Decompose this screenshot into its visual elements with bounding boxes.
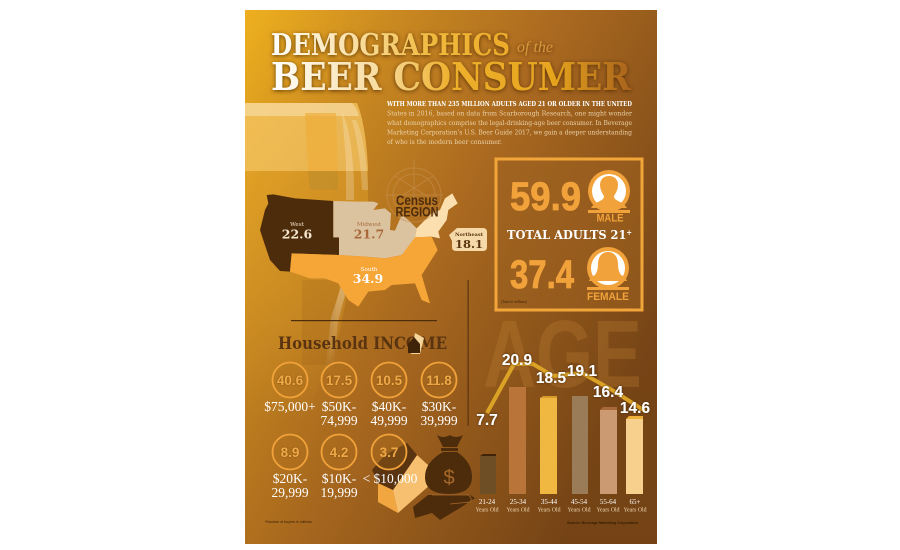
icon: male bbox=[588, 170, 630, 224]
icon: money bag and hand: $ bbox=[443, 467, 455, 489]
income: $75,000+: 40.6 bbox=[277, 373, 304, 388]
divider bbox=[291, 320, 437, 321]
age labels: Years Old bbox=[596, 508, 620, 514]
census region map bbox=[260, 160, 487, 307]
footnote: number of buyers: *Number of buyers in millions bbox=[265, 520, 312, 524]
age labels: 65+ bbox=[630, 498, 641, 506]
income: $30K-39,999: $30K- bbox=[422, 399, 457, 414]
income: $50K-74,999: 17.5 bbox=[326, 373, 353, 388]
age labels bbox=[475, 498, 647, 514]
icon: male: MALE bbox=[596, 212, 624, 224]
intro text: what demographics comprise the legal-drinking-age beer consumer. In Beverage bbox=[387, 119, 632, 127]
age labels: 55-64 bbox=[600, 498, 617, 506]
income: under $10,000: 3.7 bbox=[380, 445, 398, 460]
income: $75,000+ bbox=[264, 362, 316, 414]
icon: female bbox=[587, 247, 629, 303]
south value: 34.9 bbox=[353, 271, 383, 286]
age trend line bbox=[487, 364, 645, 413]
northeast value callout: 18.1 bbox=[455, 237, 483, 251]
map: northeast bbox=[415, 193, 458, 238]
male value: 59.9 bbox=[510, 175, 581, 219]
census region label bbox=[396, 192, 438, 220]
income: $10K-19,999: 19,999 bbox=[320, 485, 358, 500]
income: $20K-29,999: 8.9 bbox=[281, 445, 299, 460]
map: south bbox=[290, 237, 438, 307]
northeast value callout bbox=[449, 228, 487, 251]
income: $30K-39,999: 11.8 bbox=[426, 373, 452, 388]
income: $20K-29,999: 29,999 bbox=[271, 485, 309, 500]
intro text: Marketing Corporation’s U.S. Beer Guide 2017, we gain a deeper understanding bbox=[387, 128, 633, 136]
age labels: Years Old bbox=[623, 508, 647, 514]
icon: female: FEMALE bbox=[587, 291, 629, 303]
intro text: of who is the modern beer consumer. bbox=[387, 138, 502, 146]
footnote: total in millions: (Total in millions) bbox=[501, 300, 528, 304]
income: $20K-29,999 bbox=[271, 434, 309, 500]
income: $40K-49,999 bbox=[370, 362, 408, 428]
title: DEMOGRAPHICS bbox=[271, 28, 510, 63]
income: $30K-39,999 bbox=[420, 362, 458, 428]
title: BEER CONSUMER bbox=[271, 54, 631, 99]
bar: 45-54 bbox=[572, 396, 588, 494]
bar: 21-24 bbox=[480, 454, 496, 494]
compass icon bbox=[385, 160, 443, 222]
income: $10K-19,999 bbox=[320, 434, 358, 500]
map: midwest bbox=[333, 201, 417, 258]
intro text: States in 2016, based on data from Scarborough Research, one might wonder bbox=[387, 110, 633, 118]
bar: 55-64 bbox=[600, 407, 617, 494]
household income heading: Household INCOME bbox=[278, 334, 447, 353]
map: west bbox=[260, 194, 339, 272]
age values: 7.7 bbox=[476, 412, 498, 429]
source: Source: Beverage Marketing Corporation bbox=[567, 520, 639, 525]
income: $40K-49,999: 10.5 bbox=[376, 373, 403, 388]
income: $40K-49,999: $40K- bbox=[372, 399, 407, 414]
income: under $10,000 bbox=[363, 434, 418, 486]
age labels: 21-24 bbox=[479, 498, 496, 506]
age values: 16.4 bbox=[593, 384, 623, 401]
income: $75,000+: $75,000+ bbox=[264, 399, 316, 414]
icon: house in heading bbox=[408, 333, 424, 354]
age heading: AGE bbox=[483, 301, 642, 408]
bar: 25-34 bbox=[509, 387, 526, 494]
age values: 18.5 bbox=[536, 370, 566, 387]
age bar chart bbox=[480, 387, 643, 494]
panel: total adults bbox=[496, 159, 642, 310]
age values: 14.6 bbox=[620, 400, 650, 417]
south value: South bbox=[361, 267, 378, 273]
west value: West bbox=[290, 222, 305, 228]
age labels: Years Old bbox=[506, 508, 530, 514]
income: $50K-74,999 bbox=[320, 362, 358, 428]
age values: 19.1 bbox=[567, 363, 597, 380]
age labels: Years Old bbox=[567, 508, 591, 514]
icon: money bag and hand bbox=[413, 435, 475, 520]
age labels: Years Old bbox=[537, 508, 561, 514]
northeast value callout: Northeast bbox=[455, 232, 484, 238]
age labels: 45-54 bbox=[571, 498, 588, 506]
income: $50K-74,999: 74,999 bbox=[320, 413, 358, 428]
icon: house bbox=[372, 443, 430, 513]
income: $50K-74,999: $50K- bbox=[322, 399, 357, 414]
poster background bbox=[245, 10, 657, 544]
midwest value: Midwest bbox=[357, 222, 382, 228]
income: under $10,000: < $10,000 bbox=[363, 471, 418, 486]
total adults label: + bbox=[626, 228, 632, 237]
census region label: Census bbox=[396, 192, 438, 208]
beer glass illustration bbox=[245, 103, 368, 420]
intro text: WITH MORE THAN 235 MILLION ADULTS AGED 21 OR OLDER IN THE UNITED bbox=[386, 100, 632, 108]
census region label: REGION bbox=[396, 204, 438, 220]
female value: 37.4 bbox=[510, 253, 575, 297]
income: $20K-29,999: $20K- bbox=[273, 471, 308, 486]
income: $10K-19,999: $10K- bbox=[322, 471, 357, 486]
age labels: 35-44 bbox=[541, 498, 558, 506]
income circles bbox=[264, 362, 458, 500]
intro text bbox=[386, 100, 633, 146]
title bbox=[271, 28, 631, 99]
income: $30K-39,999: 39,999 bbox=[420, 413, 458, 428]
income: $40K-49,999: 49,999 bbox=[370, 413, 408, 428]
west value: 22.6 bbox=[282, 226, 313, 242]
midwest value: 21.7 bbox=[354, 226, 384, 242]
bar: 65+ bbox=[626, 416, 643, 494]
age labels: 25-34 bbox=[510, 498, 527, 506]
age values bbox=[476, 352, 650, 429]
title: of the bbox=[517, 39, 553, 56]
income: $10K-19,999: 4.2 bbox=[330, 445, 348, 460]
age labels: Years Old bbox=[475, 508, 499, 514]
bar: 35-44 bbox=[540, 396, 557, 494]
age values: 20.9 bbox=[502, 352, 532, 369]
total adults label: TOTAL ADULTS 21 bbox=[507, 228, 633, 242]
